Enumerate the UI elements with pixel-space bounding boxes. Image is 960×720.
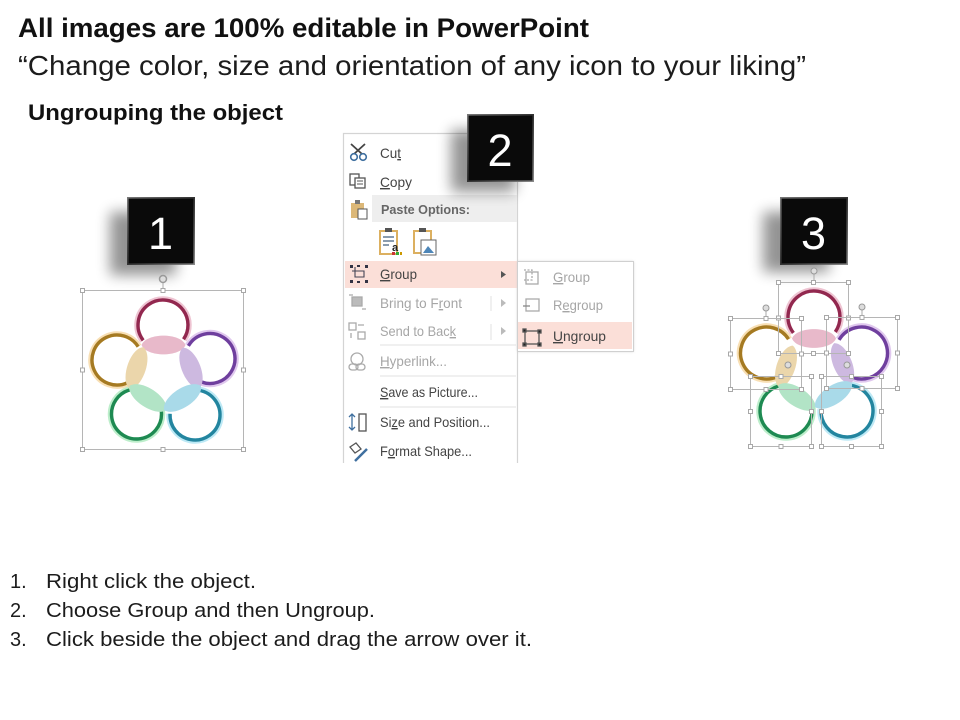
step 3 text: 3. — [10, 629, 27, 651]
badge 2: 2 — [487, 125, 513, 176]
selection box: bottom right — [820, 362, 884, 448]
lens: mint — [773, 377, 821, 417]
lens: lilac — [826, 340, 859, 387]
badge shadow 2 — [451, 130, 515, 192]
panel: step 3 ungrouped object — [728, 197, 900, 448]
badge shadow 3 — [763, 212, 829, 272]
lens: pink — [792, 329, 836, 348]
menu item: Paste Options: Paste Options: — [381, 202, 470, 217]
ring: gold — [82, 325, 152, 395]
submenu — [518, 262, 634, 352]
ring: purple — [174, 323, 246, 394]
step 2 text: Choose Group and then Ungroup. — [46, 600, 375, 622]
menu item: Size and Position: Size and Position... — [380, 414, 490, 430]
icon: paste text: a — [392, 242, 399, 254]
title: All images are 100% editable in PowerPoint — [18, 13, 589, 43]
group row highlight — [345, 261, 517, 288]
step 3 text: Click beside the object and drag the arrow over it. — [46, 629, 532, 651]
arrow: group submenu — [501, 271, 506, 278]
menu item: Cut: Cut — [380, 145, 401, 161]
badge 3: 3 — [801, 208, 826, 259]
badge 3 — [780, 197, 848, 265]
paste options row — [372, 195, 517, 222]
icon: size and position — [349, 414, 366, 431]
ring: purple — [824, 316, 899, 390]
icon: regroup — [523, 299, 539, 311]
menu item: Send to Back: Send to Back — [380, 323, 457, 339]
panel: step 2 context menu — [344, 114, 634, 464]
instructions list — [10, 571, 532, 651]
ring: teal — [165, 385, 225, 445]
selection box: left — [728, 305, 804, 392]
lens: tan — [121, 344, 152, 392]
lens: lilac — [174, 344, 208, 392]
badge 1: 1 — [148, 208, 173, 259]
ring: magenta — [127, 289, 199, 361]
icon: copy — [350, 174, 365, 188]
ungroup highlight — [518, 322, 632, 349]
badge shadow 1 — [110, 212, 176, 275]
step 1 text: 1. — [10, 571, 27, 593]
menu item: Save as Picture: Save as Picture... — [380, 384, 478, 400]
subtitle: “Change color, size and orientation of any icon to your liking” — [18, 50, 806, 81]
ring: teal — [816, 380, 878, 442]
menu item: Format Shape: Format Shape... — [380, 443, 472, 459]
submenu item: Ungroup: Ungroup — [553, 328, 606, 344]
selection box 1 — [80, 276, 246, 452]
lens: pink — [142, 336, 186, 354]
step 2 text: 2. — [10, 600, 27, 622]
icon: paste — [351, 200, 367, 219]
ring: gold — [731, 317, 802, 389]
menu background — [344, 134, 518, 464]
ring: green — [757, 382, 815, 440]
step 1 text: Right click the object. — [46, 571, 256, 593]
lens: sky — [810, 375, 857, 415]
panel: step 1 grouped object — [80, 197, 246, 452]
lens: mint — [124, 378, 172, 418]
ring: magenta — [776, 279, 852, 355]
icon: paste text — [380, 228, 402, 255]
submenu item: Group: Group — [553, 269, 590, 285]
icon: bring to front — [349, 295, 366, 309]
icon: paste picture — [414, 228, 436, 255]
submenu item: Regroup: Regroup — [553, 297, 603, 313]
selection box: right — [824, 304, 900, 390]
icon: format shape — [350, 443, 367, 461]
icon: sub group — [524, 270, 538, 284]
menu item: Bring to Front: Bring to Front — [380, 295, 462, 311]
icon: group — [350, 265, 368, 283]
icon: send to back — [349, 323, 365, 339]
selection box: top — [776, 268, 850, 356]
section heading: Ungrouping the object — [28, 100, 284, 125]
badge 1 — [127, 197, 195, 265]
selection box: bottom left — [748, 362, 814, 448]
menu item: Group: Group — [380, 266, 417, 282]
arrow: bring submenu — [501, 299, 506, 307]
lens: tan — [770, 343, 802, 390]
menu borders — [344, 134, 518, 463]
ring: green — [108, 386, 165, 442]
menu item: Hyperlink: Hyperlink... — [380, 353, 447, 369]
arrow: send submenu — [501, 327, 506, 335]
icon: scissors — [351, 144, 366, 160]
lens: sky — [159, 378, 206, 418]
badge 2 — [467, 114, 534, 182]
icon: ungroup — [523, 329, 541, 346]
menu item: Copy: Copy — [380, 174, 412, 190]
icon: hyperlink — [349, 353, 365, 370]
